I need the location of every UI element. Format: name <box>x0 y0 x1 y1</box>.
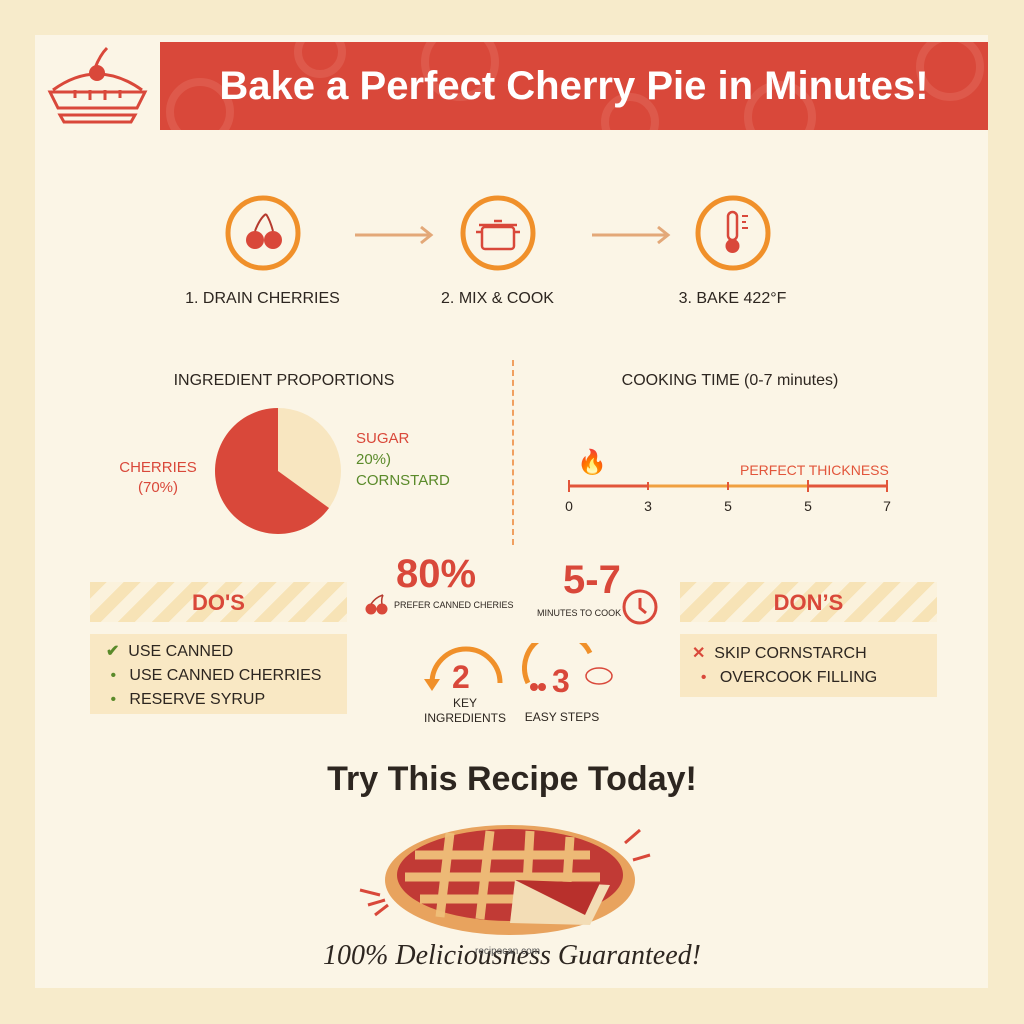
panel: do's: ✔ USE CANNED <box>106 643 233 660</box>
stat: 5-7 <box>537 558 658 624</box>
stat: 80%: 80% <box>396 552 476 596</box>
stat: 2 key ingredients <box>424 646 506 725</box>
timeline: 5 <box>804 498 812 514</box>
icon: thermometer <box>696 196 770 270</box>
icon: clock <box>622 590 658 624</box>
panel: ingredient proportions: CHERRIES <box>119 459 197 476</box>
illustration: cherry pie <box>360 825 650 935</box>
panel: don'ts: • OVERCOOK FILLING <box>701 669 877 686</box>
stat: 2 key ingredients: 2 <box>452 659 470 695</box>
icon: flame: 🔥 <box>577 449 607 476</box>
panel: do's: DO'S <box>192 590 245 615</box>
icon: cherries <box>226 196 300 270</box>
timeline <box>565 480 891 514</box>
panel: ingredient proportions: 20%) <box>356 451 391 468</box>
panel: ingredient proportions: SUGAR <box>356 430 409 447</box>
icon: pie logo <box>48 47 148 124</box>
step 1 <box>185 196 340 307</box>
arrow <box>592 226 670 244</box>
timeline: 3 <box>644 498 652 514</box>
banner <box>160 42 988 130</box>
panel: don'ts: ✕ SKIP CORNSTARCH <box>692 645 867 662</box>
panel: do's: • RESERVE SYRUP <box>110 691 265 708</box>
stat: 2 key ingredients: KEY <box>453 696 477 710</box>
panel: ingredient proportions: INGREDIENT PROPORTIONS <box>174 372 394 389</box>
stat: 80% <box>366 552 514 614</box>
stat: 80%: PREFER CANNED CHERIES <box>394 600 514 610</box>
stat: 5-7: 5-7 <box>563 558 621 602</box>
panel: don'ts: DON’S <box>774 590 843 615</box>
stat: 3 easy steps: 3 <box>552 663 570 699</box>
stat: 3 easy steps: EASY STEPS <box>525 710 599 724</box>
pie chart <box>215 408 341 534</box>
icon: cherry <box>366 594 388 614</box>
title: Bake a Perfect Cherry Pie in Minutes! <box>219 64 929 108</box>
tagline: 100% Deliciousness Guaranteed! <box>323 940 701 971</box>
stat: 5-7: MINUTES TO COOK <box>537 608 621 618</box>
panel: ingredient proportions: (70%) <box>138 479 178 496</box>
divider <box>512 360 514 545</box>
step 2: 2. MIX & COOK <box>441 290 554 307</box>
panel: do's: • USE CANNED CHERRIES <box>110 667 321 684</box>
stat: 2 key ingredients: INGREDIENTS <box>424 711 506 725</box>
text: recipecan.com <box>475 946 540 957</box>
stat: 3 easy steps <box>522 643 613 724</box>
panel: cooking time: PERFECT THICKNESS <box>740 462 889 478</box>
panel: ingredient proportions: CORNSTARD <box>356 472 450 489</box>
panel: cooking time: COOKING TIME (0-7 minutes) <box>622 372 838 389</box>
timeline: 5 <box>724 498 732 514</box>
panel: cooking time <box>565 372 891 514</box>
heading: try this recipe: Try This Recipe Today! <box>327 760 697 798</box>
icon: pot <box>460 196 536 270</box>
timeline: 7 <box>883 498 891 514</box>
step 2 <box>441 196 554 307</box>
panel: don'ts <box>680 582 937 697</box>
step 1: 1. DRAIN CHERRIES <box>185 290 340 307</box>
panel: ingredient proportions <box>119 372 450 534</box>
panel: do's <box>90 582 347 714</box>
arrow <box>355 226 434 244</box>
step 3: 3. BAKE 422°F <box>679 290 786 307</box>
timeline: 0 <box>565 498 573 514</box>
step 3 <box>679 196 786 307</box>
